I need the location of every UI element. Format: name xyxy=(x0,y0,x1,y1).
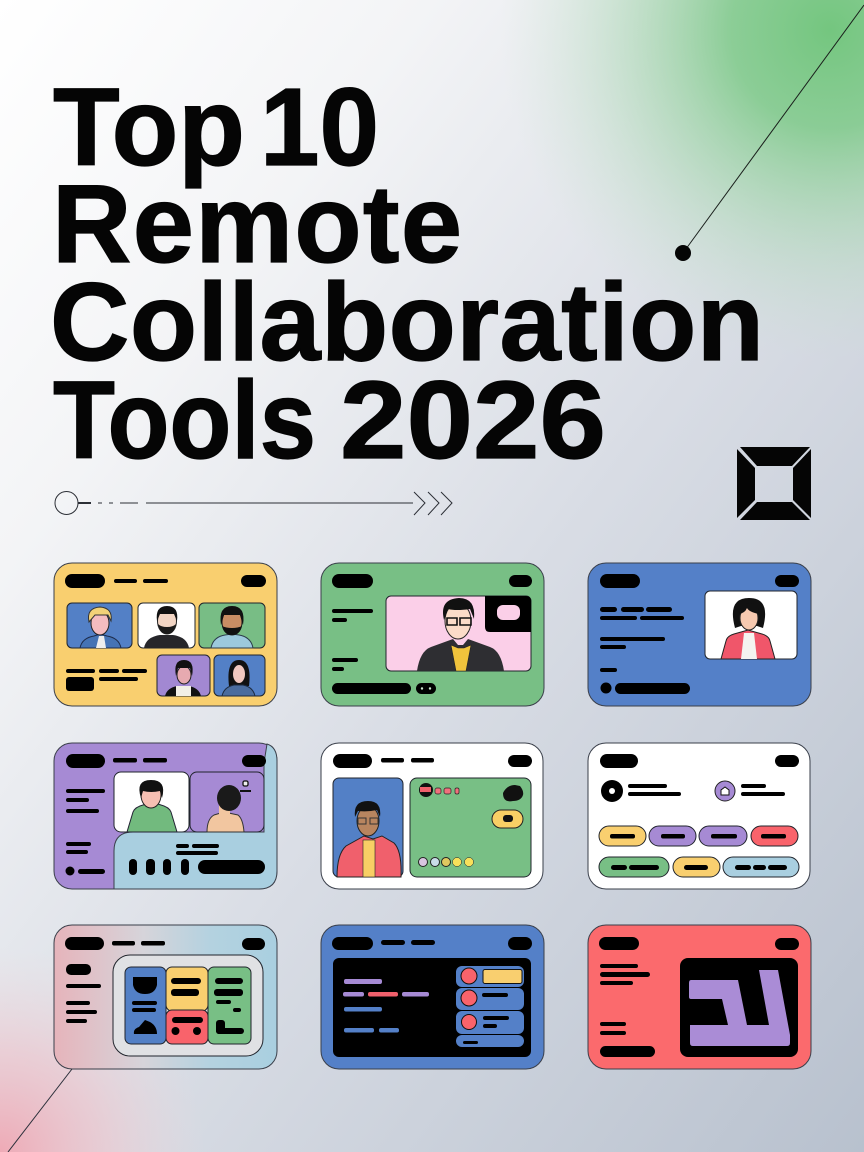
title: Remote xyxy=(52,163,462,286)
panel: duo call card xyxy=(54,743,277,889)
panel: code editor card xyxy=(321,925,544,1069)
tag pills row 2 xyxy=(599,857,799,877)
title: 2026 xyxy=(340,359,606,482)
participant: man in blue shirt xyxy=(199,603,265,648)
green column xyxy=(208,967,251,1044)
call controls xyxy=(129,844,265,875)
control dots xyxy=(421,687,431,690)
panel: presenter card xyxy=(321,563,544,706)
participant: blond man xyxy=(67,603,132,648)
panel: kanban card xyxy=(54,925,277,1069)
light blue corner xyxy=(114,744,277,889)
header bars xyxy=(65,937,265,950)
avatars with text xyxy=(601,780,785,802)
header bars xyxy=(65,574,266,588)
text placeholders xyxy=(66,669,147,691)
text placeholders xyxy=(600,964,655,1057)
black editor xyxy=(333,958,531,1057)
purple logo mark xyxy=(689,970,790,1046)
text placeholders xyxy=(66,789,105,876)
title: 10 xyxy=(260,66,379,189)
header bars xyxy=(332,574,532,588)
panel: chat card xyxy=(321,743,543,889)
red column xyxy=(166,1010,208,1044)
decorative line with dot, top right xyxy=(675,5,864,261)
participant: long-haired woman xyxy=(214,655,265,696)
participant: man in green xyxy=(114,772,189,832)
presenter video xyxy=(386,596,531,671)
green chat panel xyxy=(410,778,531,877)
participant: woman in white xyxy=(157,655,210,696)
text placeholders xyxy=(66,964,101,1023)
woman portrait xyxy=(705,591,797,659)
title: Top xyxy=(53,66,245,189)
header bars xyxy=(66,754,266,768)
title: Tools xyxy=(53,359,316,482)
blue column xyxy=(125,967,166,1044)
header bars xyxy=(333,754,532,768)
participant: bearded man xyxy=(138,603,195,648)
panel: tags card xyxy=(588,743,810,889)
panel: red logo card xyxy=(588,925,811,1069)
header bars xyxy=(332,937,532,950)
arrow: timeline with chevrons xyxy=(55,492,452,515)
header bars xyxy=(600,754,799,768)
board frame xyxy=(113,955,263,1056)
black logo panel xyxy=(680,958,798,1057)
header bars xyxy=(600,574,799,588)
header bars xyxy=(599,937,799,950)
title: Collaboration xyxy=(50,261,764,384)
sidebar list xyxy=(456,966,524,1047)
icon: square frame xyxy=(737,447,811,520)
panel: video grid card xyxy=(54,563,277,706)
participant: back view xyxy=(190,772,264,832)
yellow column xyxy=(166,967,208,1011)
man in red jacket xyxy=(333,778,403,877)
decorative line, bottom left xyxy=(8,1069,72,1152)
panel: profile card xyxy=(588,563,811,706)
tag pills row 1 xyxy=(599,826,798,846)
code lines xyxy=(343,979,429,1032)
title xyxy=(50,66,764,482)
text placeholders xyxy=(332,609,436,694)
text placeholders xyxy=(600,607,690,694)
